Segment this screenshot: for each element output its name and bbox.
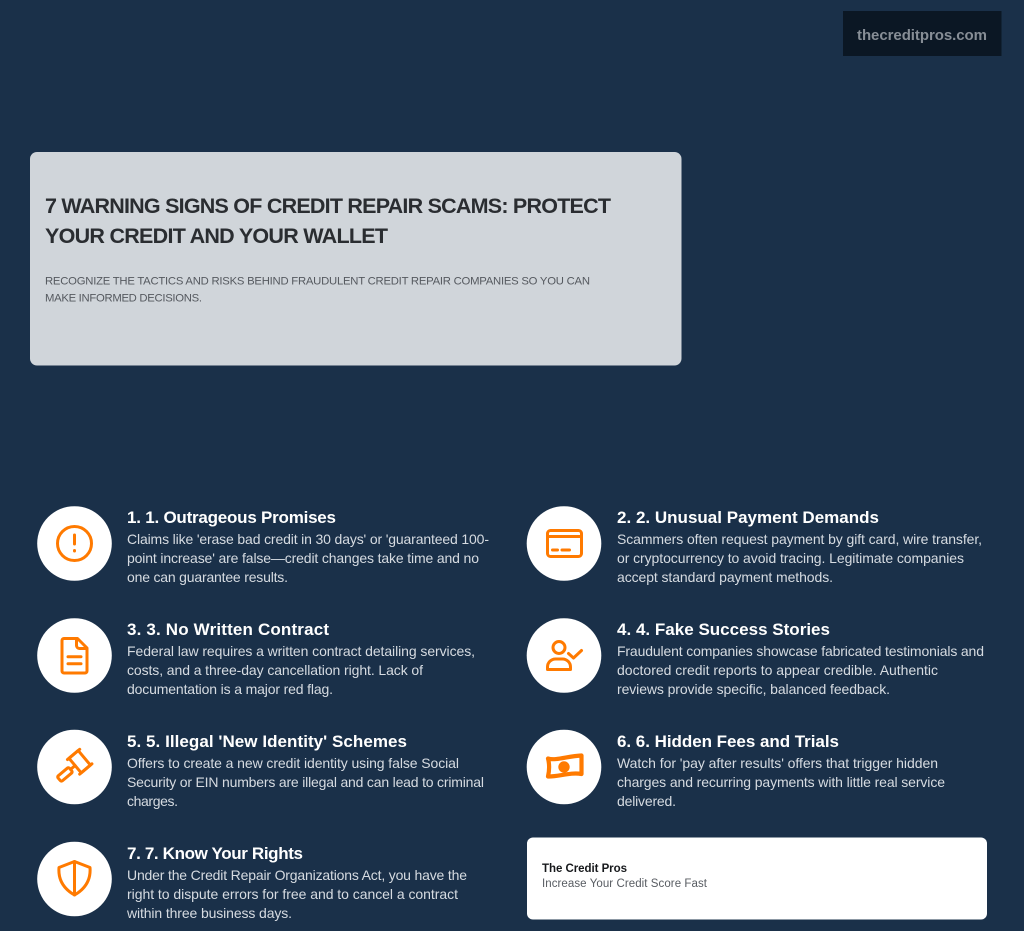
text 3: Federal law requires a written contract detailing services, <box>127 643 475 659</box>
text 5: Security or EIN numbers are illegal and can lead to criminal <box>127 774 484 790</box>
item 6: hidden fees and trials <box>527 730 945 809</box>
text 7: right to dispute errors for free and to cancel a contract <box>127 886 458 902</box>
text 2: Scammers often request payment by gift card, wire transfer, <box>617 531 982 547</box>
text 5: charges. <box>127 793 178 809</box>
logo badge <box>843 11 1002 56</box>
text 1 <box>127 531 489 585</box>
brand name: The Credit Pros <box>542 863 627 875</box>
item 2: unusual payment demands <box>527 506 982 585</box>
heading 4: 4. 4. Fake Success Stories <box>617 620 830 639</box>
text 5: Offers to create a new credit identity using false Social <box>127 755 459 771</box>
icon: gavel <box>53 749 92 786</box>
text 7 <box>126 867 467 921</box>
heading 1: 1. 1. Outrageous Promises <box>127 508 336 527</box>
text 3 <box>127 643 475 697</box>
heading 6: 6. 6. Hidden Fees and Trials <box>617 732 839 751</box>
icon: document <box>62 638 87 673</box>
text 6: delivered. <box>617 793 676 809</box>
heading 2: 2. 2. Unusual Payment Demands <box>617 508 879 527</box>
icon: alert circle <box>58 526 92 560</box>
icon: banknote <box>548 756 582 777</box>
text 4: Fraudulent companies showcase fabricated testimonials and <box>617 643 984 659</box>
title: YOUR CREDIT AND YOUR WALLET <box>45 224 388 248</box>
text 6: Watch for 'pay after results' offers that trigger hidden <box>617 755 938 771</box>
text 1: point increase' are false—credit changes take time and no <box>127 550 479 566</box>
title: 7 WARNING SIGNS OF CREDIT REPAIR SCAMS: PROTECT <box>45 194 611 218</box>
item 4: fake success stories <box>527 618 984 697</box>
brand card <box>527 838 987 920</box>
heading 5: 5. 5. Illegal 'New Identity' Schemes <box>127 732 407 751</box>
text 3: costs, and a three-day cancellation right. Lack of <box>127 662 423 678</box>
item 5: illegal new identity schemes <box>37 730 484 809</box>
item 1: outrageous promises <box>37 506 489 585</box>
text 4 <box>617 643 984 697</box>
text 7: Under the Credit Repair Organizations Act, you have the <box>127 867 467 883</box>
icon: shield <box>59 862 90 895</box>
text 6 <box>617 755 945 809</box>
subtitle: MAKE INFORMED DECISIONS. <box>45 292 202 304</box>
text 1: one can guarantee results. <box>127 569 288 585</box>
item 3: no written contract <box>37 618 475 697</box>
text 4: reviews provide specific, balanced feedback. <box>617 681 890 697</box>
logo badge: thecreditpros.com <box>857 27 987 44</box>
text 6: charges and recurring payments with little real service <box>617 774 945 790</box>
tagline: Increase Your Credit Score Fast <box>542 878 708 890</box>
subtitle: RECOGNIZE THE TACTICS AND RISKS BEHIND FRAUDULENT CREDIT REPAIR COMPANIES SO YOU CAN <box>45 276 590 288</box>
text 3: documentation is a major red flag. <box>127 681 333 697</box>
text 2: accept standard payment methods. <box>617 569 833 585</box>
text 5 <box>127 755 484 809</box>
subtitle <box>45 276 590 304</box>
text 1: Claims like 'erase bad credit in 30 days' or 'guaranteed 100- <box>127 531 489 547</box>
heading 3: 3. 3. No Written Contract <box>127 620 329 639</box>
hero panel <box>30 152 682 366</box>
text 2: or cryptocurrency to avoid tracing. Legitimate companies <box>617 550 964 566</box>
heading 7: 7. 7. Know Your Rights <box>127 844 303 863</box>
icon: user with check <box>548 642 582 670</box>
text 4: doctored credit reports to appear credible. Authentic <box>617 662 938 678</box>
text 2 <box>617 531 982 585</box>
icon: credit card <box>548 530 582 556</box>
title <box>45 194 611 248</box>
item 7: know your rights <box>37 842 467 921</box>
text 7: within three business days. <box>126 905 292 921</box>
